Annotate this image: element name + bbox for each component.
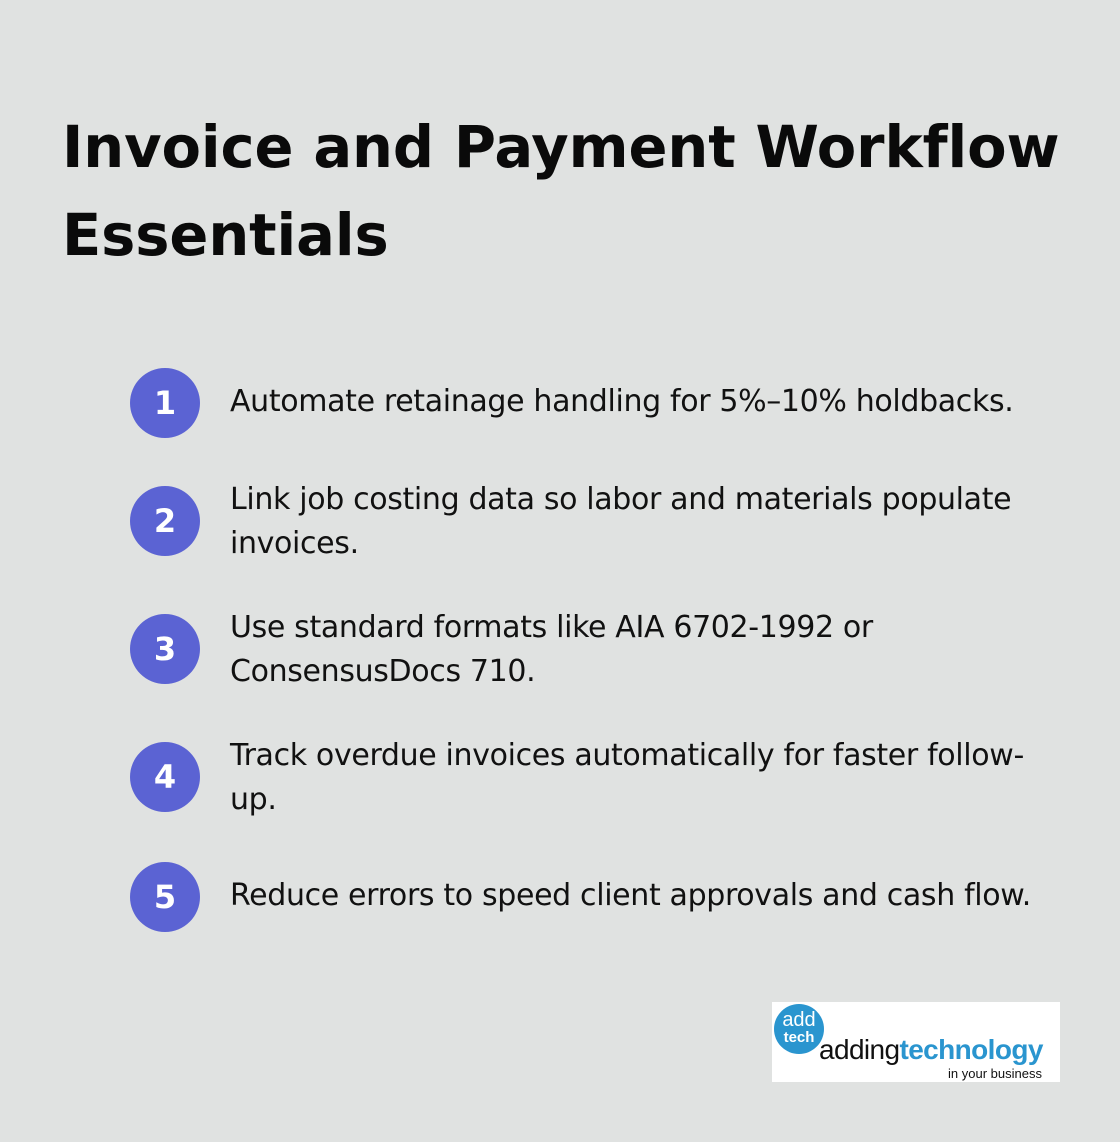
item 2: [130, 482, 1011, 561]
icon: addtech circle: tech: [784, 1029, 814, 1046]
logo: [772, 1002, 1060, 1082]
item 1: 1: [154, 384, 176, 422]
item 2: Link job costing data so labor and materials populate: [230, 482, 1011, 517]
icon: addtech circle: [774, 1004, 824, 1054]
title: [62, 114, 1060, 269]
item 4: Track overdue invoices automatically for faster follow-: [230, 738, 1024, 773]
item 2: 2: [154, 502, 176, 540]
item 3: 3: [154, 630, 176, 668]
item 5: 5: [154, 878, 176, 916]
item 4: [130, 738, 1024, 817]
item 4: up.: [230, 782, 277, 817]
item 2: invoices.: [230, 526, 359, 561]
item 3: Use standard formats like AIA 6702-1992 or: [230, 610, 873, 645]
logo: in your business: [948, 1066, 1042, 1081]
item 4: 4: [154, 758, 176, 796]
icon: addtech circle: add: [782, 1009, 816, 1031]
item 1: Automate retainage handling for 5%–10% holdbacks.: [230, 384, 1013, 419]
logo text: addingtechnology: [819, 1034, 1043, 1065]
item 3: ConsensusDocs 710.: [230, 654, 535, 689]
title: Invoice and Payment Workflow: [62, 114, 1060, 181]
title: Essentials: [62, 202, 389, 269]
item 1: [130, 368, 1013, 438]
item 3: [130, 610, 874, 689]
item 5: Reduce errors to speed client approvals and cash flow.: [230, 878, 1031, 913]
item 5: [130, 862, 1031, 932]
